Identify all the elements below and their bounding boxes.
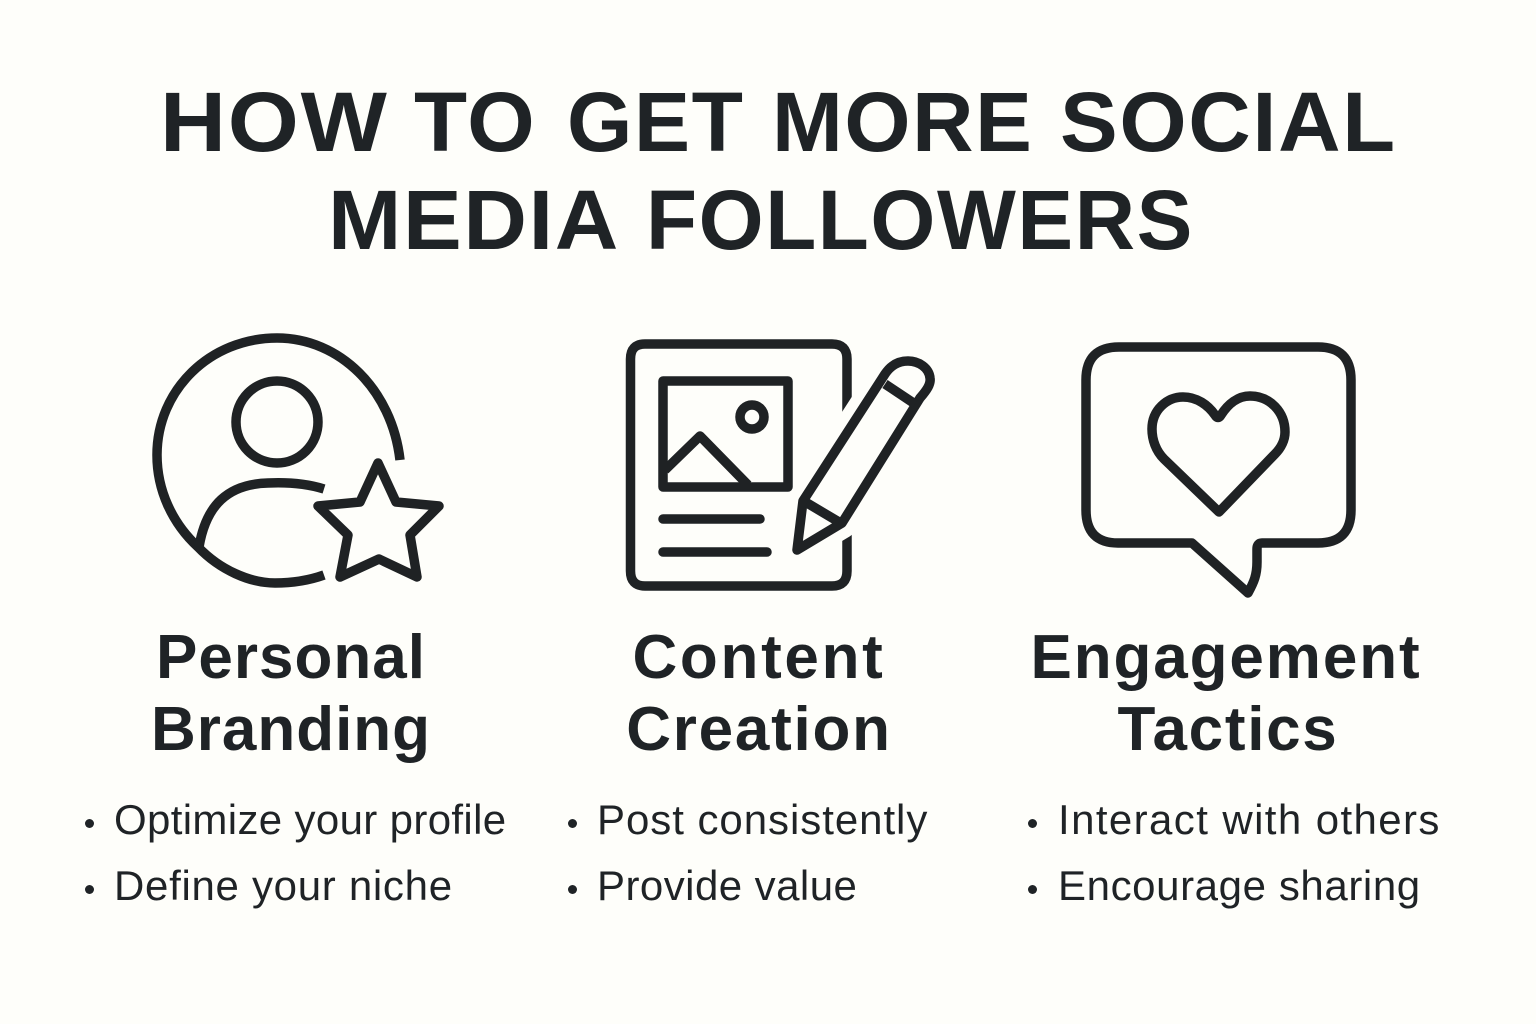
list: content creation: Provide value	[597, 862, 857, 909]
list: personal branding	[85, 796, 506, 909]
heading: personal branding	[151, 623, 431, 764]
heading: personal branding: Personal	[156, 623, 426, 692]
pencil	[797, 361, 930, 550]
title: SOCIAL	[1060, 75, 1397, 169]
list: personal branding: Optimize your profile	[114, 796, 506, 843]
icon: profile with star	[152, 333, 444, 588]
profile ring	[157, 338, 400, 583]
title: GET	[567, 75, 744, 169]
icon: content document with pencil	[626, 339, 935, 591]
heading: content creation: Content	[632, 623, 886, 692]
profile head	[236, 381, 318, 463]
pencil bands	[807, 384, 915, 522]
image sun	[740, 405, 764, 429]
list: personal branding: Define your niche	[114, 862, 453, 909]
profile shoulders	[199, 483, 324, 547]
title: FOLLOWERS	[646, 173, 1194, 267]
list: engagement tactics	[1028, 796, 1441, 909]
pencil halo	[797, 361, 930, 550]
document outline	[630, 344, 847, 586]
title: MEDIA	[328, 173, 620, 267]
title: TO	[414, 75, 536, 169]
image mountain	[665, 436, 748, 485]
text lines	[663, 519, 767, 552]
heading: content creation	[626, 623, 892, 764]
list: content creation: Post consistently	[597, 796, 928, 843]
heading: engagement tactics: Engagement	[1030, 623, 1422, 692]
heading: content creation: Creation	[626, 695, 892, 764]
icon: speech bubble with heart	[1081, 342, 1356, 598]
list: engagement tactics: Encourage sharing	[1058, 862, 1421, 909]
title	[160, 75, 1397, 267]
list: engagement tactics: Interact with others	[1058, 796, 1441, 843]
heading: personal branding: Branding	[151, 695, 431, 764]
title: MORE	[772, 75, 1034, 169]
heading: engagement tactics	[1030, 623, 1422, 764]
heading: engagement tactics: Tactics	[1118, 695, 1338, 764]
star	[318, 463, 439, 577]
image frame	[663, 381, 788, 487]
heart	[1152, 396, 1285, 512]
title: HOW	[160, 75, 389, 169]
speech bubble	[1086, 347, 1351, 593]
list: content creation	[568, 796, 928, 909]
